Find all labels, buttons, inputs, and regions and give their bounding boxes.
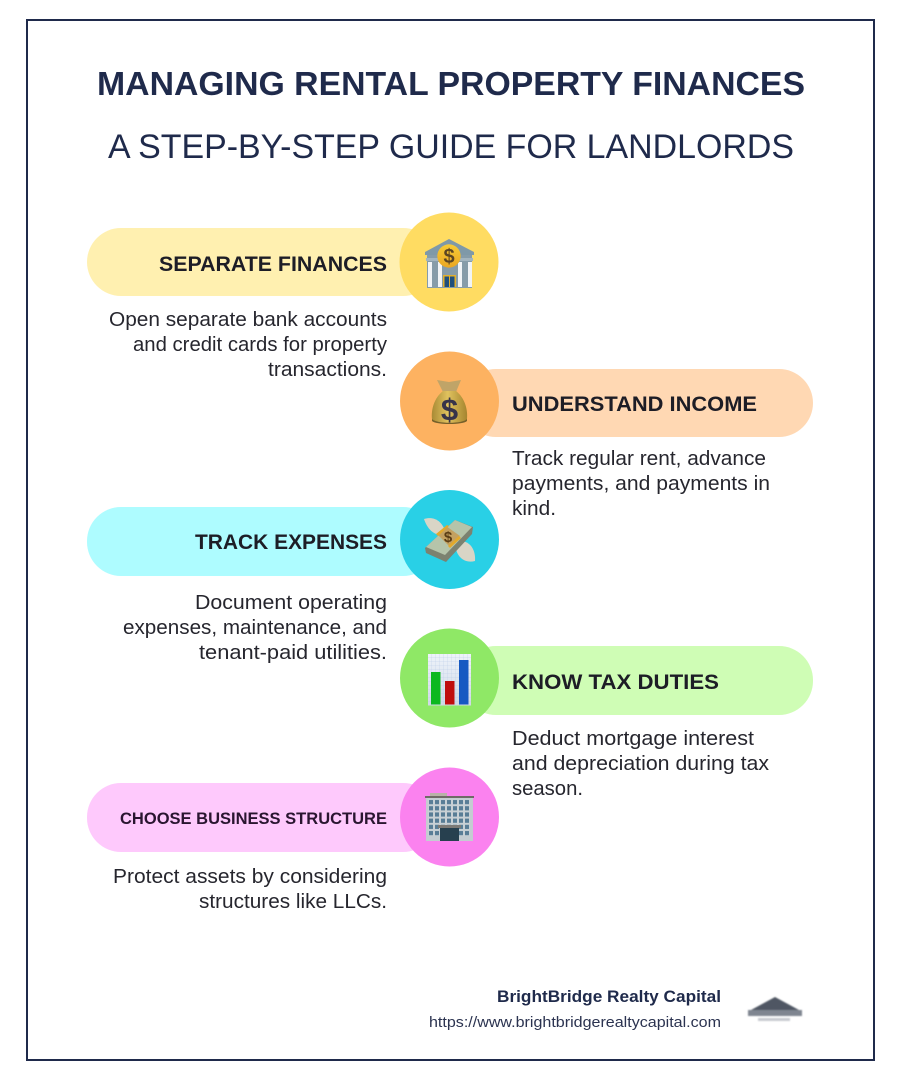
description: separate finances: and credit cards for property — [133, 334, 387, 356]
heading: know tax duties: KNOW TAX DUTIES — [512, 671, 719, 694]
pill: track expenses — [87, 507, 437, 576]
heading: separate finances: SEPARATE FINANCES — [159, 253, 387, 276]
icon: money bag: $ — [441, 392, 458, 427]
description: choose business structure — [113, 866, 387, 913]
step 5: choose business structure — [87, 768, 499, 913]
icon circle: orange — [400, 352, 499, 450]
icon circle: green — [400, 628, 499, 728]
step 1: separate finances — [87, 212, 498, 381]
description: understand income — [512, 448, 770, 520]
pill: know tax duties — [462, 646, 813, 715]
icon: money with wings: $ — [444, 529, 453, 546]
footer logo — [748, 997, 802, 1021]
icon: bank — [425, 239, 474, 288]
description: know tax duties: season. — [512, 778, 583, 800]
step 4: know tax duties — [400, 628, 813, 800]
icon: office building — [425, 793, 474, 841]
description: separate finances — [109, 309, 387, 381]
icon circle: pink — [400, 768, 499, 866]
pill: separate finances — [87, 228, 437, 296]
icon: money with wings — [424, 518, 475, 562]
description: know tax duties: Deduct mortgage interest — [512, 728, 754, 750]
description: understand income: payments, and payments in — [512, 473, 770, 495]
description: choose business structure: Protect assets by considering — [113, 866, 387, 888]
title: MANAGING RENTAL PROPERTY FINANCES — [97, 65, 805, 102]
step 3: track expenses — [87, 490, 499, 664]
description: understand income: kind. — [512, 498, 556, 520]
description: choose business structure: structures like LLCs. — [199, 891, 387, 913]
icon: money bag — [432, 380, 467, 427]
description: track expenses: tenant-paid utilities. — [199, 642, 387, 664]
description: separate finances: Open separate bank accounts — [109, 309, 387, 331]
pill: understand income — [462, 369, 813, 437]
description: track expenses: expenses, maintenance, and — [123, 617, 387, 639]
description: track expenses: Document operating — [195, 592, 387, 614]
icon: bar chart — [428, 654, 471, 706]
description: understand income: Track regular rent, advance — [512, 448, 766, 470]
heading: understand income: UNDERSTAND INCOME — [512, 393, 757, 416]
footer: website url: https://www.brightbridgerealtycapital.com — [429, 1014, 721, 1031]
description: track expenses — [123, 592, 387, 664]
heading: choose business structure: CHOOSE BUSINESS STRUCTURE — [120, 809, 387, 828]
icon circle: cyan — [400, 490, 499, 589]
pill: choose business structure — [87, 783, 437, 852]
description: know tax duties: and depreciation during tax — [512, 753, 769, 775]
subtitle: A STEP-BY-STEP GUIDE FOR LANDLORDS — [108, 128, 794, 166]
heading: track expenses: TRACK EXPENSES — [195, 531, 387, 554]
step 2: understand income — [400, 352, 813, 520]
footer: company name: BrightBridge Realty Capital — [497, 987, 721, 1006]
icon circle: yellow — [400, 212, 498, 312]
description: separate finances: transactions. — [268, 359, 387, 381]
icon: bank: $ — [443, 246, 455, 268]
description: know tax duties — [512, 728, 769, 800]
